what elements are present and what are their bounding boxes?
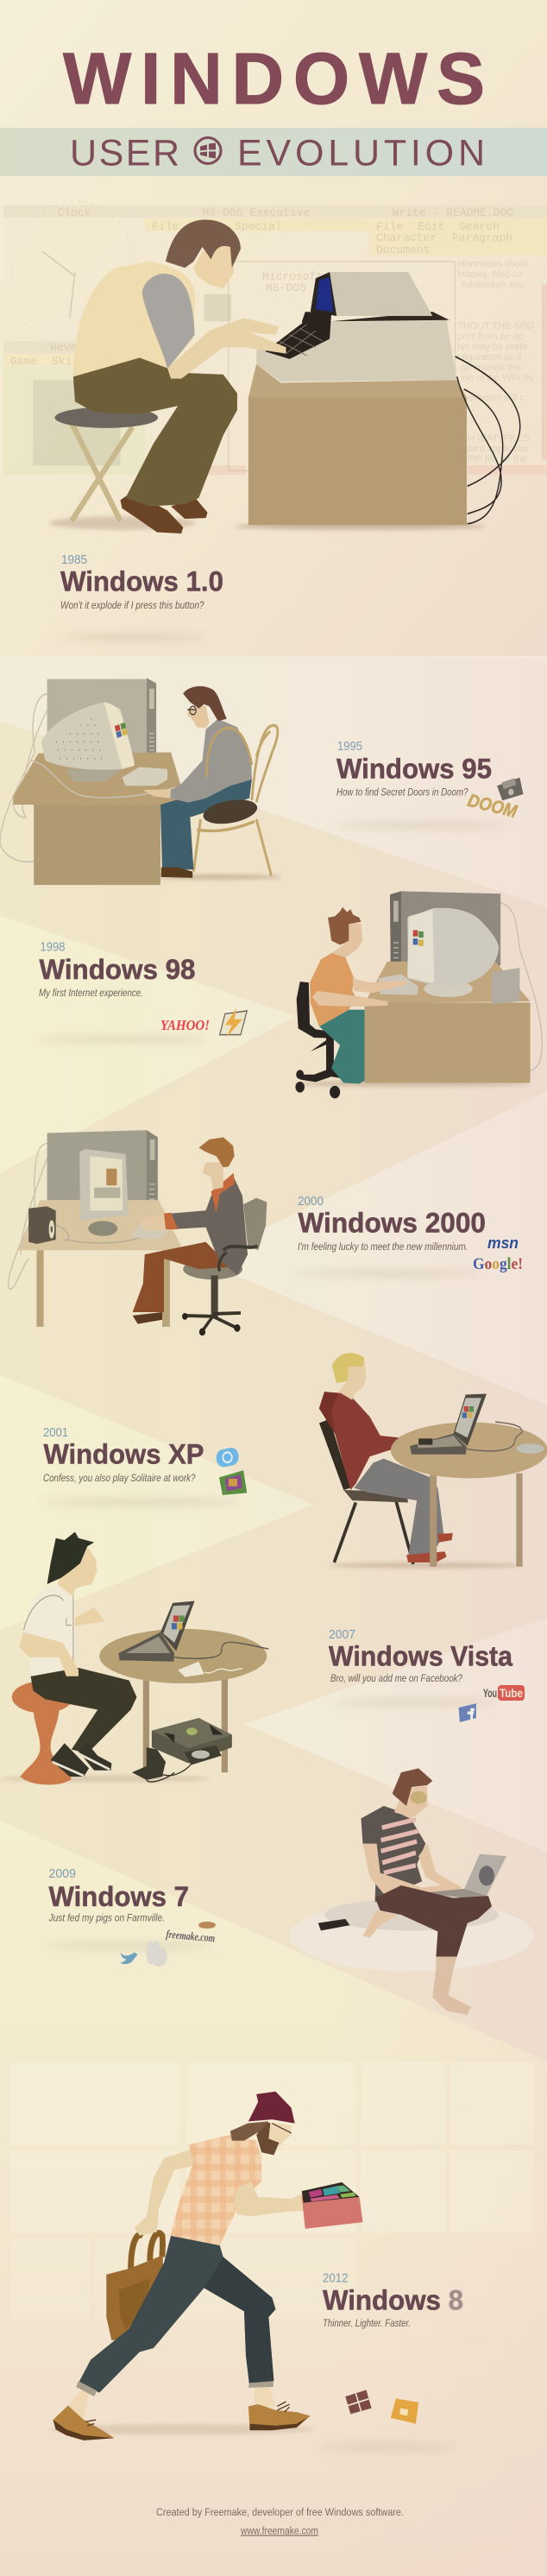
ghost Windows 1.0 desktop behind first scene: PIF file for the <box>468 454 526 464</box>
round table <box>99 1629 267 1772</box>
label: Windows Vista <box>329 1627 525 1722</box>
ghost Windows 1.0 desktop behind first scene: File <box>152 220 179 233</box>
icon: music player <box>178 1662 242 1677</box>
ghost Windows 1.0 desktop behind first scene: ion of the WIN.IN <box>461 373 533 383</box>
label: Windows 98: 1998 <box>40 939 66 955</box>
desk <box>364 962 531 1083</box>
ghost Windows 1.0 desktop behind first scene: his may be prefe <box>457 342 527 352</box>
ghost Windows 1.0 desktop behind first scene: Microsoft <box>262 270 323 283</box>
chair back <box>243 1198 267 1250</box>
label: Windows 98: My first Internet experience. <box>39 988 143 999</box>
computer <box>256 272 520 524</box>
label: Windows XP: Confess, you also play Solitaire at work? <box>43 1474 196 1484</box>
icon: twitter bird <box>120 1953 138 1964</box>
label: Windows 1.0 <box>60 552 223 640</box>
ghost Windows 1.0 desktop behind first scene <box>3 201 547 475</box>
label: Windows 95: How to find Secret Doors in Doom? <box>336 787 468 798</box>
ghost Windows 1.0 desktop behind first scene: Document <box>376 243 430 256</box>
logo: msn: msn <box>487 1234 519 1252</box>
tower <box>47 1130 158 1216</box>
label: Windows 1.0: 1985 <box>61 552 87 567</box>
label: Windows 7: Windows 7 <box>48 1881 189 1912</box>
label: Windows 2000: Windows 2000 <box>299 1207 486 1238</box>
icon: floppy disk <box>497 778 523 800</box>
label: Windows 95: Windows 95 <box>336 753 492 784</box>
round table <box>391 1422 547 1567</box>
scene: Windows 7 user <box>290 1768 534 2015</box>
subtitle word: user: USER <box>70 133 179 174</box>
label: Windows 7 <box>43 1866 216 1967</box>
label: Windows 95 <box>336 739 523 828</box>
logo: Doom: DOOM <box>466 791 519 822</box>
label: Windows 98: Windows 98 <box>40 954 195 985</box>
ghost Windows 1.0 desktop behind first scene: Addendum enc <box>461 280 525 290</box>
person <box>310 907 406 1083</box>
label: Windows 7: Just fed my pigs on Farmville. <box>48 1913 165 1923</box>
logo: Google: Google! <box>473 1255 523 1273</box>
label: Windows 8: Thinner. Lighter. Faster. <box>323 2319 411 2329</box>
title: WINDOWS <box>63 38 485 119</box>
label: Windows XP: Windows XP <box>43 1438 204 1469</box>
ghost Windows 1.0 desktop behind first scene: Game <box>10 355 37 368</box>
label: Windows 8 <box>319 2270 463 2451</box>
monitor <box>407 908 499 997</box>
person <box>133 1137 257 1312</box>
icon: windows logo badge <box>195 138 221 164</box>
logo: freemake <box>166 1922 216 1945</box>
tower <box>390 891 500 972</box>
label: Windows 2000: 2000 <box>298 1194 324 1209</box>
stool <box>12 1682 73 1784</box>
scene: Windows 95 user <box>0 678 282 885</box>
stool <box>54 407 158 521</box>
ghost Windows 1.0 desktop behind first scene: dard applicatio <box>466 444 528 454</box>
ghost Windows 1.0 desktop behind first scene: Character <box>376 231 437 244</box>
scene: Windows 1.0 user with computer <box>49 219 520 534</box>
ghost Windows 1.0 desktop behind first scene: Clock <box>57 206 91 219</box>
person <box>73 219 286 534</box>
person <box>143 686 259 878</box>
person <box>361 1768 506 1968</box>
ghost Windows 1.0 desktop behind first scene: Reve <box>50 341 77 354</box>
ghost Windows 1.0 desktop behind first scene: MS-DOS <box>266 281 306 294</box>
bag <box>106 2233 163 2340</box>
pouf seat <box>290 1899 534 1971</box>
desk <box>13 752 186 885</box>
label: Windows 1.0: Won't it explode if I press this button? <box>60 601 204 611</box>
label: Windows 7: 2009 <box>48 1866 76 1881</box>
subtitle band <box>0 128 547 176</box>
chair <box>193 725 278 875</box>
ghost Windows 1.0 desktop behind first scene: print from an ap <box>457 331 524 342</box>
ghost Windows 1.0 desktop behind first scene: CH (BAT) FILES <box>461 433 530 444</box>
logo: Facebook <box>459 1703 476 1722</box>
ghost Windows 1.0 desktop behind first scene: Write - README.DOC <box>393 206 513 219</box>
icon: Skype <box>215 1446 240 1468</box>
logo: YouTube: You <box>483 1686 497 1700</box>
label: Windows Vista: Bro, will you add me on Facebook? <box>330 1674 463 1684</box>
label: Windows 8: 2012 <box>323 2270 349 2286</box>
chair <box>295 982 362 1098</box>
label: Windows Vista: 2007 <box>329 1627 355 1642</box>
ghost Windows 1.0 desktop behind first scene: THOUT THE SPO <box>457 321 534 331</box>
subtitle word: evolution: EVOLUTION <box>237 133 485 174</box>
ghost Windows 1.0 desktop behind first scene: Paragraph <box>452 231 512 244</box>
label: Windows 8: Windows 8 <box>323 2284 463 2315</box>
icon: Windows 8 logo <box>345 2390 372 2414</box>
icon: Winamp <box>220 1008 247 1038</box>
tablet in box <box>302 2182 362 2229</box>
chair <box>319 1419 413 1564</box>
label: Windows Vista: Windows Vista <box>329 1640 512 1671</box>
label: Windows XP <box>43 1425 247 1505</box>
person <box>53 2092 311 2440</box>
scene: Windows 98 user <box>293 891 542 1098</box>
person <box>19 1531 136 1777</box>
label: Windows XP: 2001 <box>43 1425 68 1440</box>
speaker <box>28 1206 56 1244</box>
monitor <box>79 1149 129 1236</box>
ghost Windows 1.0 desktop behind first scene: MS-DOS Executive <box>203 206 310 219</box>
label: Windows 2000: I'm feeling lucky to meet the new millennium. <box>298 1242 468 1253</box>
logo: YouTube <box>483 1685 525 1701</box>
desk <box>18 1200 183 1312</box>
logo: Yahoo: YAHOO! <box>160 1017 210 1033</box>
foot of Windows 7 user <box>432 1968 471 2015</box>
ghost Windows 1.0 desktop behind first scene: File <box>376 220 403 233</box>
ghost Windows 1.0 desktop behind first scene: Special <box>235 220 282 233</box>
desk box <box>248 364 467 525</box>
label: Windows 1.0: Windows 1.0 <box>60 566 223 597</box>
ghost Windows 1.0 desktop behind first scene: nformation shoul <box>457 259 527 269</box>
person <box>319 1353 453 1563</box>
ghost Windows 1.0 desktop behind first scene: ooleans will c <box>468 393 525 403</box>
logo: YouTube: Tube <box>500 1686 523 1700</box>
Windows 8 ghost tile grid <box>10 2061 534 2321</box>
label: Windows 2000 <box>293 1194 523 1276</box>
laptop <box>410 1394 487 1455</box>
ghost Windows 1.0 desktop behind first scene: Ski <box>52 355 72 368</box>
footer link: www.freemake.com <box>240 2526 318 2536</box>
ghost Windows 1.0 desktop behind first scene: indows. Also co <box>457 269 523 280</box>
footer credit <box>156 2508 404 2536</box>
label: Windows 98 <box>35 939 247 1042</box>
lower part of Windows 2000 desk, legs and chair <box>36 1312 241 1335</box>
scene: Windows 2000 user <box>9 1130 267 1335</box>
ghost Windows 1.0 desktop behind first scene: nfiguration as it <box>457 352 522 363</box>
scene: Windows XP user <box>319 1353 547 1569</box>
icon: store bag <box>391 2398 418 2424</box>
ghost Windows 1.0 desktop behind first scene: ge change the <box>461 363 521 373</box>
scene: Windows 8 user <box>49 2092 418 2440</box>
monitor <box>41 702 135 781</box>
tower <box>47 678 156 765</box>
label: Windows 95: 1995 <box>337 739 362 754</box>
game console <box>132 1718 232 1782</box>
ghost Windows 1.0 desktop behind first scene: Search <box>459 220 500 233</box>
logo: freemake: freemake.com <box>166 1928 216 1945</box>
laptop <box>118 1601 195 1662</box>
icon: rabbit <box>146 1941 167 1967</box>
phone <box>318 1919 350 1930</box>
icon: game box <box>219 1470 247 1495</box>
footer credit: Created by Freemake, developer of free Windows software. <box>156 2508 404 2518</box>
scene: Windows Vista user <box>0 1531 268 1784</box>
ghost Windows 1.0 desktop behind first scene: Edit <box>418 220 444 233</box>
